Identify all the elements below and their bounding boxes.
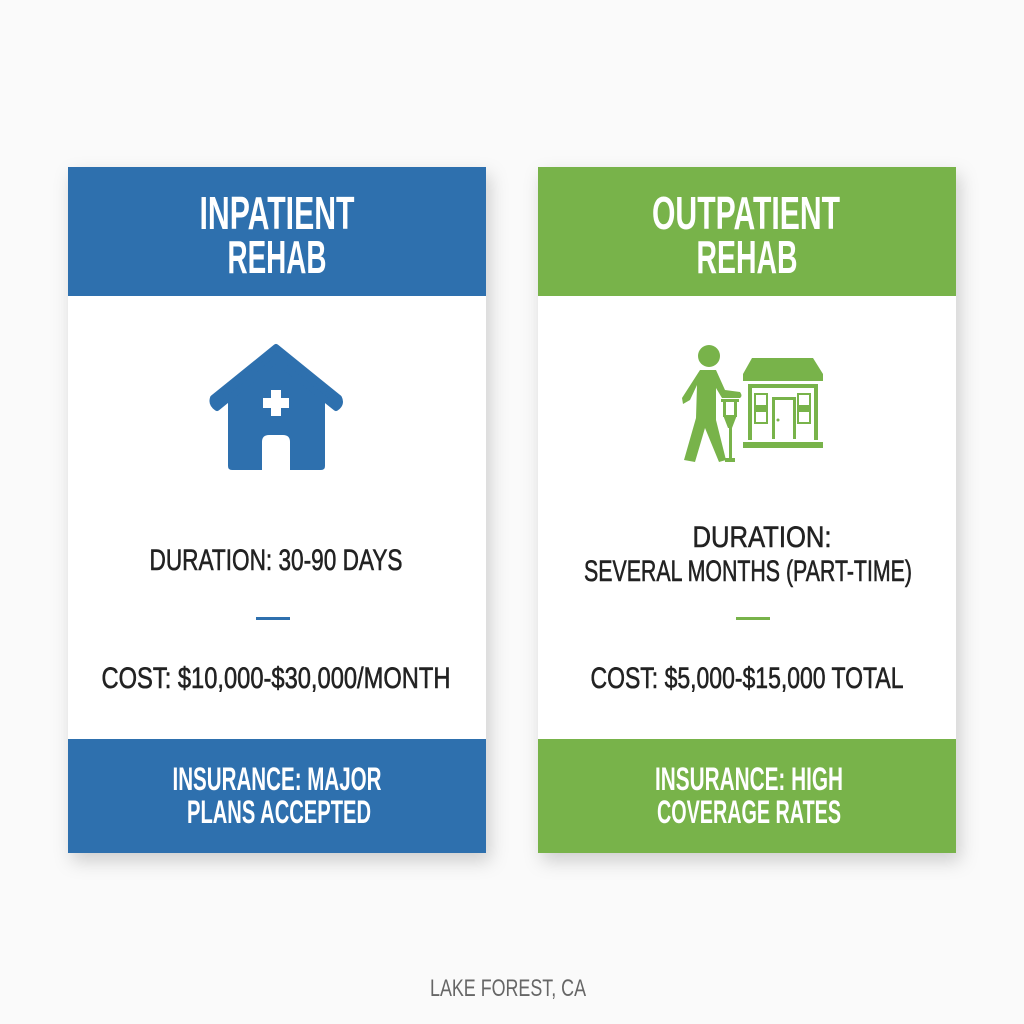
header: inpatient: REHAB xyxy=(228,231,326,283)
header: outpatient: OUTPATIENT xyxy=(652,187,840,239)
text: duration: DURATION: 30-90 DAYS xyxy=(150,544,402,577)
footer: insurance: COVERAGE RATES xyxy=(657,794,841,830)
text: cost: COST: $10,000-$30,000/MONTH xyxy=(102,662,450,695)
text: duration: DURATION: xyxy=(692,521,832,554)
footer: insurance: INSURANCE: HIGH xyxy=(655,761,843,797)
footer: insurance xyxy=(68,739,486,853)
footer: insurance: PLANS ACCEPTED xyxy=(187,794,371,830)
text: duration xyxy=(584,521,912,588)
divider xyxy=(256,617,290,620)
divider xyxy=(736,617,770,620)
header: inpatient xyxy=(68,167,486,296)
header: outpatient: REHAB xyxy=(696,231,798,283)
caption: location: LAKE FOREST, CA xyxy=(430,975,586,1002)
header: outpatient xyxy=(538,167,956,296)
text: cost: COST: $5,000-$15,000 TOTAL xyxy=(590,662,904,695)
panel: outpatient rehab xyxy=(538,167,956,853)
footer: insurance: INSURANCE: MAJOR xyxy=(172,761,382,797)
icon: house with cross xyxy=(212,347,340,470)
footer: insurance xyxy=(538,739,956,853)
icon: person with crutch and clinic xyxy=(682,345,823,462)
header: inpatient: INPATIENT xyxy=(200,187,354,239)
panel: inpatient rehab xyxy=(68,167,486,853)
